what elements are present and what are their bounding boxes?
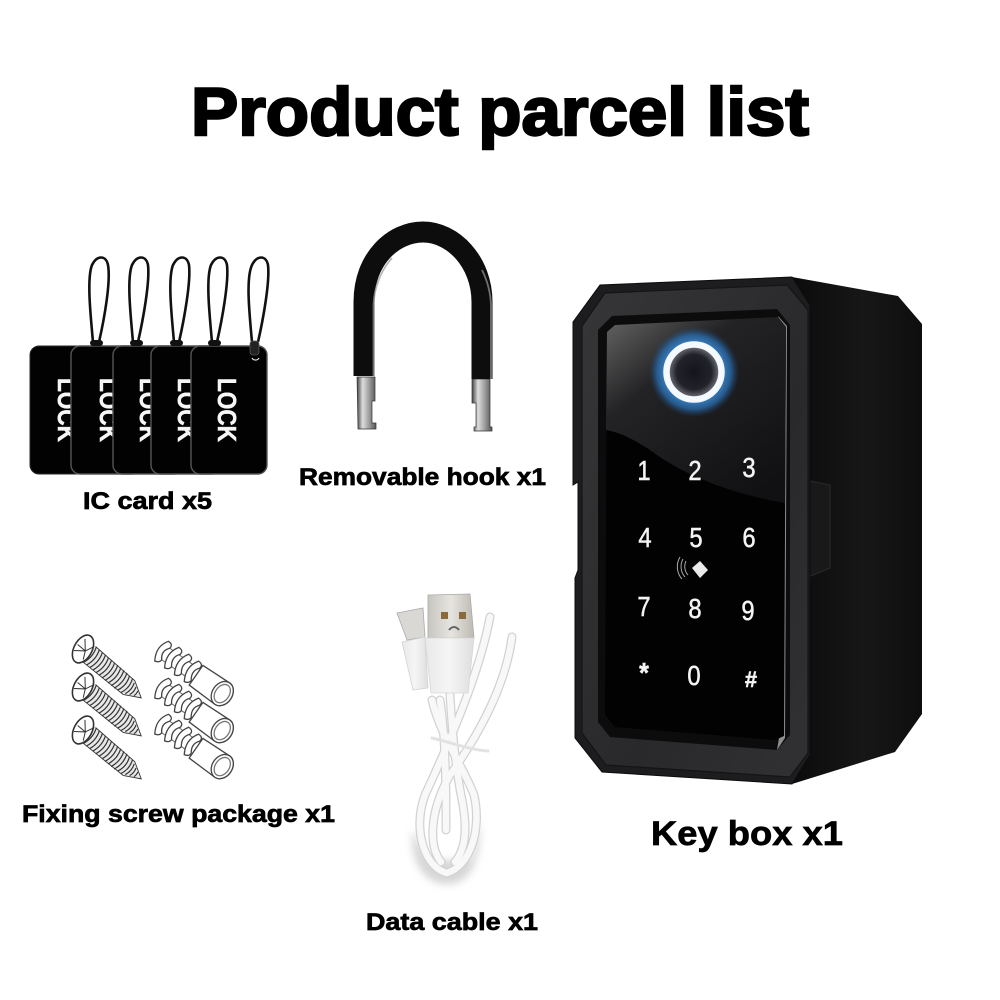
icon: anchor 1 <box>151 638 238 710</box>
keypad digits: 1 <box>637 454 651 486</box>
panel: IC cards <box>30 258 268 474</box>
micro USB housing <box>402 637 428 690</box>
label: IC card: IC card x5 <box>83 488 212 515</box>
silver edge strip <box>777 316 787 750</box>
keypad digits: 2 <box>688 454 702 486</box>
icon: IC card 2 <box>71 340 141 474</box>
label: fixing screw package: Fixing screw package x1 <box>22 801 335 828</box>
icon: IC card 5: LOCK <box>212 378 242 442</box>
keypad digits: * <box>639 657 649 688</box>
keypad digits: 4 <box>638 521 652 553</box>
USB-A housing <box>425 638 474 693</box>
label: key box: Key box x1 <box>651 815 843 853</box>
key box glass recess <box>598 309 790 750</box>
cable strands <box>420 617 512 873</box>
key box side tab <box>806 480 830 578</box>
key box glass <box>605 317 786 740</box>
keypad digits: 0 <box>687 659 701 691</box>
keypad digits: # <box>745 667 757 692</box>
keypad digits: 7 <box>637 590 651 622</box>
icon: IC card 2: LOCK <box>94 378 124 442</box>
icon: screw 1 <box>63 629 152 711</box>
icon: anchor 2 <box>151 675 238 747</box>
keypad digits <box>637 451 757 692</box>
icon: removable hook <box>357 232 492 431</box>
icon: IC card 1: LOCK <box>52 378 82 442</box>
icon: card reader <box>677 557 708 579</box>
keypad digits: 9 <box>741 594 755 626</box>
cable shadow <box>412 820 480 884</box>
USB-A metal plug <box>428 594 474 638</box>
label: data cable: Data cable x1 <box>366 909 538 936</box>
keypad digits: 6 <box>742 521 756 553</box>
glass sheen <box>606 317 786 503</box>
title: Product parcel list <box>191 74 809 150</box>
icon: IC card 1 <box>30 346 100 474</box>
key box bezel outer <box>573 277 810 784</box>
label: removable hook: Removable hook x1 <box>299 464 546 491</box>
icon: screw 2 <box>63 667 152 749</box>
icon: data cable <box>397 594 512 884</box>
icon: fixing screws and anchors <box>63 629 238 792</box>
icon: card lanyards <box>89 258 268 342</box>
keypad digits: 8 <box>688 592 702 624</box>
keypad digits: 5 <box>689 521 703 553</box>
panel: key box <box>573 277 922 784</box>
icon: IC card 5 <box>191 340 267 474</box>
key box bezel face <box>582 285 808 777</box>
icon: IC card 3 <box>113 340 183 474</box>
icon: fingerprint sensor ring <box>649 327 739 417</box>
icon: anchor 3 <box>151 711 238 783</box>
icon: screw 3 <box>63 710 152 792</box>
icon: IC card 4 <box>151 340 221 474</box>
keypad digits: 3 <box>742 451 756 483</box>
key box side <box>792 277 922 784</box>
micro USB connector <box>397 608 425 640</box>
icon: IC card 4: LOCK <box>172 378 202 442</box>
icon: IC card 3: LOCK <box>134 378 164 442</box>
